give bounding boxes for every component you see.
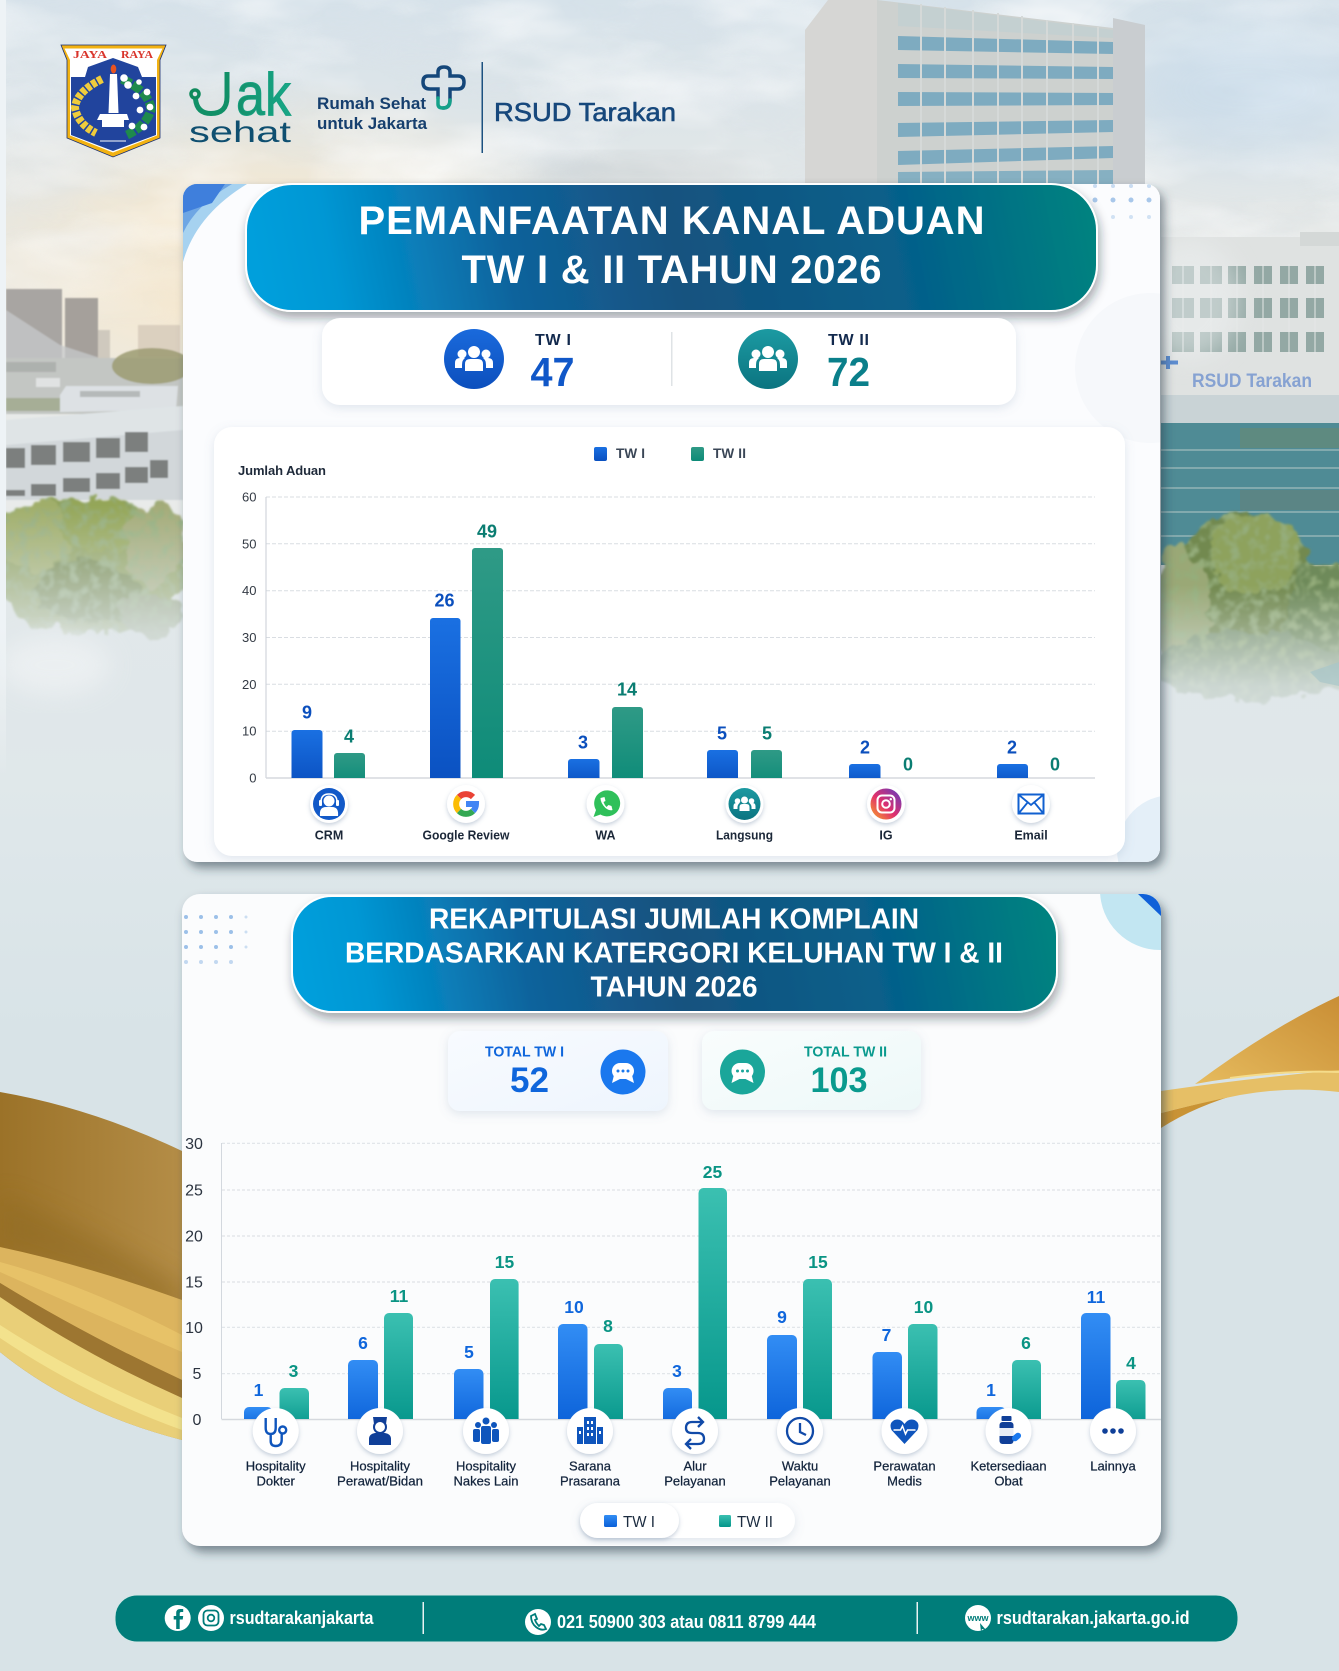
stat card: total TW II: TOTAL TW II (804, 1044, 887, 1060)
gold ribbon left (0, 1092, 182, 1440)
bar values: 0 (903, 754, 913, 774)
grid and y axis: 25 (185, 1182, 203, 1200)
grid and y axis (242, 490, 1095, 786)
category labels: Hospitality (246, 1458, 306, 1474)
icon: health cross (423, 67, 464, 108)
category labels: Hospitality (456, 1458, 516, 1474)
icon: chat (600, 1050, 646, 1094)
logo: Jak sehat: ak (236, 61, 292, 128)
left mist (6, 505, 183, 790)
grid and y axis: 20 (242, 677, 256, 692)
channel labels: Langsung (716, 828, 773, 842)
bar values: 15 (808, 1252, 828, 1272)
legend: TW II (737, 1514, 773, 1531)
icon: clock (777, 1408, 823, 1454)
category labels: Dokter (257, 1474, 296, 1488)
bar values: 7 (882, 1325, 891, 1345)
icon: CRM (310, 785, 348, 823)
bar values (302, 522, 1060, 774)
title banner: PEMANFAATAN KANAL ADUAN (358, 199, 984, 243)
grid and y axis: 10 (242, 724, 256, 738)
bar values: 5 (717, 724, 727, 744)
bar values: 9 (777, 1307, 787, 1327)
channel labels: CRM (315, 828, 343, 842)
grid and y axis: 15 (185, 1274, 203, 1292)
grid and y axis: 60 (242, 490, 256, 504)
grid and y axis: 5 (193, 1366, 202, 1383)
panel: channel chart (214, 427, 1125, 856)
title banner (292, 896, 1057, 1012)
bar values: 25 (703, 1162, 722, 1182)
title banner: TW I & II TAHUN 2026 (462, 248, 882, 292)
phone numbers: 021 50900 303 atau 0811 8799 444 (557, 1612, 816, 1632)
bar values: 10 (564, 1297, 584, 1317)
logo: Jak sehat: sehat (189, 116, 292, 149)
bar values: 14 (617, 680, 637, 700)
stat: TW II: 72 (827, 349, 870, 395)
bar values: 8 (603, 1316, 613, 1336)
stat card: total TW II (702, 1031, 921, 1110)
hospital sign (1161, 356, 1312, 392)
icon: medicine bottle (986, 1408, 1032, 1454)
header divider (482, 62, 483, 153)
category labels: Obat (994, 1474, 1023, 1488)
bar values: 11 (390, 1286, 409, 1306)
icon: people TW I (444, 329, 504, 389)
bar values: 4 (344, 726, 354, 746)
right trees (1150, 512, 1339, 702)
bars: categories (244, 1188, 1146, 1429)
stat: TW II: TW II (828, 332, 869, 349)
icon: nurse (357, 1408, 403, 1454)
category labels (246, 1458, 1137, 1488)
channel labels: WA (595, 828, 616, 842)
bar values: 6 (1021, 1333, 1031, 1353)
tower behind the first card (805, 0, 1145, 190)
legend: TW II (713, 446, 746, 461)
summary strip (322, 318, 1016, 405)
grid and y axis: 40 (242, 583, 256, 598)
icon: Langsung (726, 785, 764, 823)
legend (580, 1503, 795, 1538)
bar values: 49 (477, 522, 497, 542)
tagline: untuk Jakarta (317, 115, 428, 133)
grid and y axis: 50 (242, 536, 256, 552)
axis title: Jumlah Aduan (238, 463, 326, 478)
icon: WhatsApp (586, 785, 624, 823)
icon: building (567, 1408, 613, 1454)
icon: heart pulse (882, 1408, 928, 1454)
panel: rekapitulasi komplain (178, 892, 1172, 1559)
right mist (1161, 585, 1339, 810)
logo: Jakarta crest: JAYA (73, 50, 108, 61)
logo: Jakarta crest: RAYA (121, 50, 154, 61)
bar values: 2 (1007, 738, 1017, 758)
category labels: Sarana (569, 1458, 612, 1474)
category labels: Perawatan (873, 1458, 936, 1474)
category labels: Nakes Lain (453, 1474, 519, 1488)
icon: stethoscope (253, 1408, 299, 1454)
bar values: 5 (762, 724, 772, 744)
grid and y axis: 10 (185, 1320, 203, 1337)
hospital name: RSUD Tarakan (494, 97, 676, 127)
right hospital building (1140, 232, 1339, 565)
card decorations (183, 184, 1160, 862)
channel labels: Google Review (422, 828, 510, 842)
icon: more (1090, 1408, 1136, 1454)
category labels: Hospitality (350, 1458, 410, 1474)
icon: flow arrows (672, 1408, 718, 1454)
stat: TW I: TW I (535, 332, 571, 349)
grid and y axis: 0 (249, 770, 256, 786)
category labels: Ketersediaan (970, 1458, 1046, 1474)
bar values: 6 (358, 1333, 368, 1353)
icon: Email (1012, 785, 1050, 823)
website: rsudtarakan.jakarta.go.id (996, 1608, 1190, 1628)
icon: people TW II (738, 329, 798, 389)
legend: TW I (623, 1514, 655, 1531)
bar values: 3 (672, 1361, 682, 1381)
social handle: rsudtarakanjakarta (230, 1608, 374, 1628)
icon: web: www (966, 1613, 989, 1623)
channel labels: Email (1014, 828, 1048, 842)
stat card: total TW II: 103 (810, 1061, 868, 1100)
category labels: Prasarana (560, 1474, 621, 1488)
bar values: 3 (578, 732, 588, 752)
icon: facebook (165, 1605, 191, 1631)
title banner (246, 184, 1097, 311)
bar values: 11 (1087, 1287, 1106, 1307)
gold ribbon right (1161, 996, 1339, 1128)
bar values: 1 (986, 1380, 996, 1400)
category labels: Pelayanan (769, 1474, 831, 1488)
title banner: BERDASARKAN KATERGORI KELUHAN TW I & II (345, 938, 1003, 970)
bar values: 2 (860, 738, 870, 758)
bar values: 3 (289, 1361, 299, 1381)
bar values (254, 1162, 1136, 1400)
bar values: 4 (1126, 1353, 1136, 1373)
stat card: total TW I (448, 1031, 668, 1111)
channel labels: IG (879, 828, 893, 842)
bar values: 9 (302, 702, 312, 722)
icon: instagram (198, 1605, 224, 1631)
grid and y axis: 0 (193, 1412, 202, 1429)
bar values: 26 (434, 590, 455, 610)
hospital sign: RSUD Tarakan (1192, 371, 1312, 392)
logo: Jak sehat (189, 61, 292, 149)
footer contact bar (115, 1595, 1238, 1642)
stat: TW I: 47 (530, 349, 574, 395)
icon: web (965, 1605, 991, 1632)
tagline (317, 95, 428, 133)
category labels: Lainnya (1090, 1458, 1137, 1474)
icon: phone (525, 1609, 551, 1635)
bar values: 10 (914, 1297, 933, 1317)
icon: Google (447, 785, 485, 823)
bars: channels (292, 548, 1028, 785)
grid and y axis (185, 1136, 1161, 1429)
legend (594, 446, 746, 461)
card decorations (184, 894, 1161, 964)
icon: chat (720, 1050, 765, 1094)
title banner: TAHUN 2026 (590, 972, 758, 1004)
grid and y axis: 20 (185, 1228, 203, 1246)
header logos (61, 45, 676, 157)
background: sky, city and hospital photo (0, 0, 1339, 778)
stat card: total TW I: 52 (510, 1061, 549, 1100)
bar values: 0 (1050, 754, 1060, 774)
grid and y axis: 30 (242, 630, 256, 645)
category labels: Perawat/Bidan (337, 1474, 423, 1488)
category labels: Medis (887, 1474, 922, 1488)
logo: Jakarta crest (61, 45, 166, 157)
stat: TW II (827, 332, 870, 395)
bar values: 1 (254, 1380, 264, 1400)
legend: TW I (616, 446, 645, 461)
bar values: 15 (495, 1252, 514, 1272)
bar values: 5 (464, 1342, 474, 1362)
tagline: Rumah Sehat (317, 95, 427, 113)
left city view (6, 289, 192, 500)
title banner: REKAPITULASI JUMLAH KOMPLAIN (429, 904, 919, 936)
panel: kanal aduan (183, 184, 1227, 905)
left trees (0, 497, 190, 637)
category labels: Pelayanan (664, 1474, 726, 1488)
grid and y axis: 30 (185, 1136, 203, 1153)
icon: staff group (463, 1408, 509, 1454)
category labels: Waktu (782, 1458, 818, 1474)
channel labels (315, 828, 1048, 842)
category labels: Alur (683, 1458, 707, 1474)
stat card: total TW I: TOTAL TW I (485, 1044, 564, 1060)
icon: Instagram (867, 785, 905, 823)
